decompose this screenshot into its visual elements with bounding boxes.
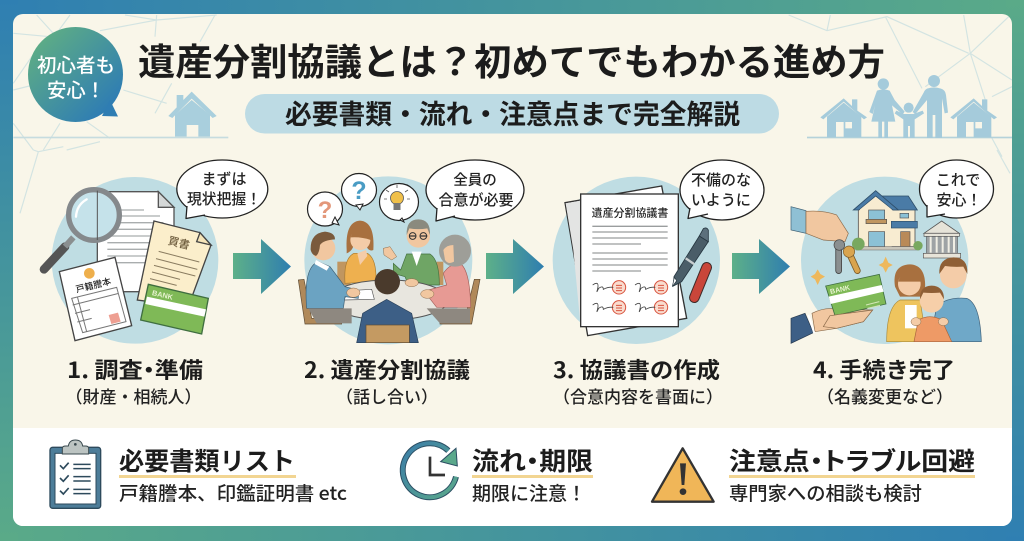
- step 4 caption: （名義変更など）: [817, 383, 953, 408]
- step 1: [44, 160, 268, 408]
- thought bubble: orange question mark: ?: [318, 197, 332, 224]
- thought bubble: blue question mark: [342, 174, 376, 210]
- step 3: [553, 160, 764, 408]
- step 2 caption: （話し合い）: [336, 383, 438, 408]
- speech bubble: まずは現状把握!: まずは: [201, 168, 247, 189]
- icon: family and houses silhouette: [807, 75, 1012, 138]
- heading: 注意点・トラブル回避: 注意点・トラブル回避: [729, 442, 975, 478]
- speech bubble: 全員の合意が必要: [426, 160, 524, 221]
- icon: warning triangle: [652, 448, 714, 502]
- underline: [729, 475, 975, 478]
- illustration: documents and magnifier: 買書: [166, 232, 192, 253]
- illustration: family meeting around a table: [298, 176, 480, 344]
- illustration: documents and magnifier: BANK: [151, 288, 175, 302]
- step 2 heading: 2. 遺産分割協議: [304, 353, 470, 385]
- step 1 heading: 1. 調査・準備: [67, 353, 203, 385]
- thought bubble: orange question mark: [308, 192, 342, 226]
- thought bubble: blue question mark: ?: [351, 177, 367, 205]
- description: 期限に注意！: [472, 479, 586, 506]
- speech bubble: 不備のないように: 不備のな: [691, 169, 751, 190]
- step 1 caption: （財産・相続人）: [66, 383, 202, 408]
- description: 専門家への相談も検討: [729, 479, 922, 506]
- speech bubble: 不備のないように: [680, 160, 764, 220]
- badge: 初心者も安心!: [28, 27, 123, 122]
- sparkles: [811, 257, 893, 285]
- illustration: agreement document, pen and seal: [553, 177, 720, 344]
- step 4 heading: 4. 手続き完了: [813, 353, 955, 385]
- underline: [472, 475, 593, 478]
- heading: 流れ・期限: 流れ・期限: [472, 442, 593, 478]
- speech bubble: まずは現状把握!: [177, 160, 268, 218]
- family: [887, 257, 981, 342]
- badge: 初心者も安心!: 安心！: [47, 74, 105, 103]
- speech bubble: 不備のないように: いように: [691, 189, 751, 210]
- step 4: [791, 160, 994, 408]
- house: [852, 191, 923, 250]
- speech bubble: まずは現状把握!: 現状把握！: [187, 188, 261, 209]
- step 3 heading: 3. 協議書の作成: [553, 353, 720, 385]
- subtitle pill: 必要書類・流れ・注意点まで完全解説: [285, 93, 740, 132]
- arrow 3: [732, 239, 790, 294]
- step 3 caption: （合意内容を書面に）: [553, 383, 723, 408]
- arrow 2: [486, 239, 544, 294]
- bank building: [923, 221, 961, 258]
- icon: clipboard: [50, 440, 101, 508]
- footer item: required documents: [50, 440, 347, 508]
- thought bubble: light bulb: [380, 184, 418, 222]
- speech bubble: これで安心!: 安心！: [936, 189, 982, 210]
- title: 遺産分割協議とは？初めてでもわかる進め方: [138, 32, 885, 86]
- footer item: flow and deadline: [403, 442, 593, 506]
- icon: house left: [13, 92, 228, 138]
- hand holding keys: [791, 207, 857, 271]
- illustration: documents and magnifier: [44, 177, 218, 344]
- illustration: house, keys, bank card and family: [791, 177, 981, 344]
- underline: [119, 475, 296, 478]
- arrow 1: [233, 239, 291, 294]
- bank card and lower hand: [791, 274, 886, 343]
- speech bubble: 全員の合意が必要: 合意が必要: [438, 189, 514, 210]
- speech bubble: 全員の合意が必要: 全員の: [453, 169, 497, 190]
- description: 戸籍謄本、印鑑証明書 etc: [119, 479, 347, 506]
- speech bubble: これで安心!: [920, 160, 994, 218]
- icon: clock with arrow: [403, 443, 457, 497]
- badge: 初心者も安心!: 初心者も: [37, 49, 115, 78]
- heading: 必要書類リスト: 必要書類リスト: [119, 442, 295, 478]
- illustration: agreement document, pen and seal: 遺産分割協議書: [592, 205, 668, 221]
- step 2: [298, 160, 524, 408]
- footer item: cautions: [652, 442, 975, 506]
- speech bubble: これで安心!: これで: [936, 169, 980, 190]
- illustration: documents and magnifier: 戸籍謄本: [74, 274, 112, 296]
- bank card and lower hand: BANK: [830, 285, 851, 296]
